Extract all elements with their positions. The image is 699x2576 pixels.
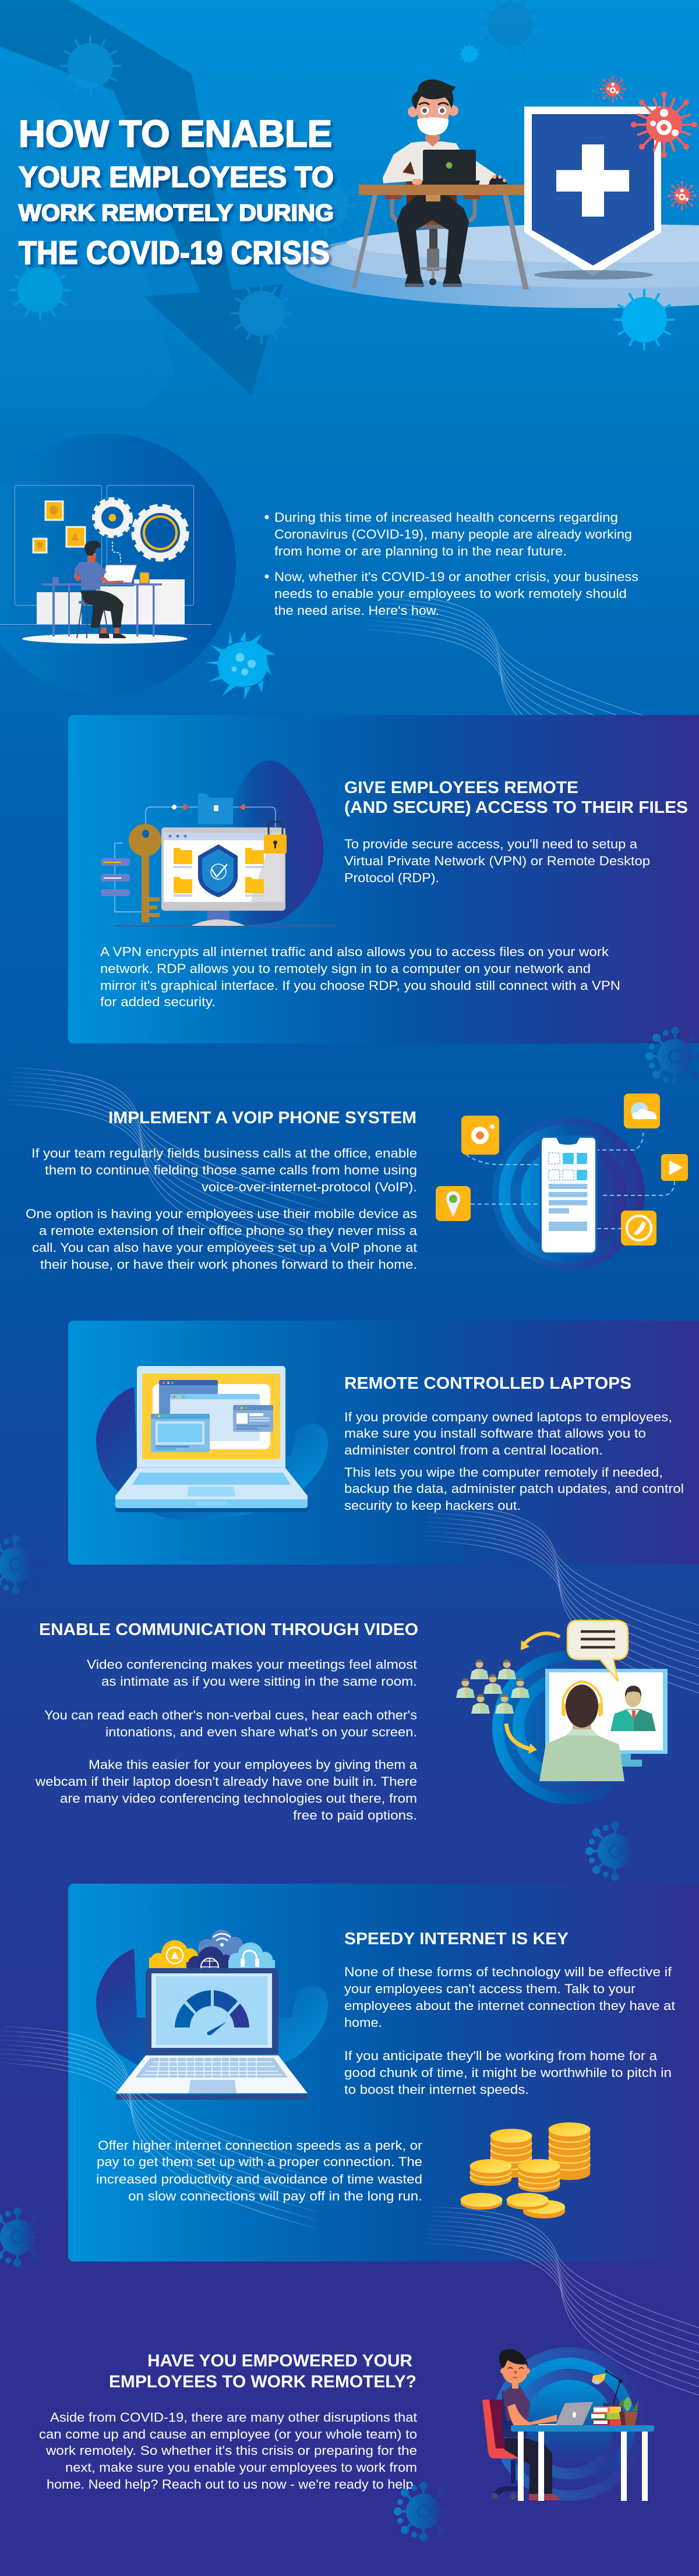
body text: Aside from COVID-19, there are many other disruptions that — [50, 2410, 417, 2425]
illustration: person at desk with laptop — [482, 2347, 654, 2501]
heading: REMOTE CONTROLLED LAPTOPS — [344, 1374, 631, 1393]
bullet list: needs to enable your employees to work remotely should — [274, 586, 627, 601]
wave lines — [6, 1068, 333, 1271]
red viruses — [599, 76, 697, 210]
illustration: secure files monitor — [101, 760, 337, 926]
virus blue — [205, 631, 276, 700]
body text — [344, 1410, 684, 1513]
body text: on slow connections will pay off in the long run. — [128, 2189, 422, 2203]
chair — [385, 164, 481, 285]
body text: To provide secure access, you'll need to setup a — [344, 837, 638, 851]
shirt — [383, 141, 496, 185]
heading: IMPLEMENT A VOIP PHONE SYSTEM — [108, 1109, 416, 1127]
wave lines — [0, 2026, 322, 2230]
wave lines — [423, 1504, 699, 1707]
background arrow shape — [0, 0, 283, 408]
body text: free to paid options. — [293, 1808, 417, 1823]
bullet list — [264, 510, 638, 618]
body text: This lets you wipe the computer remotely if needed, — [344, 1465, 663, 1480]
wave lines — [365, 593, 691, 797]
body text: Virtual Private Network (VPN) or Remote Desktop — [344, 854, 650, 868]
chair — [482, 2400, 530, 2499]
panel: intro — [0, 433, 691, 797]
body text: good chunk of time, it might be worthwhile to pitch in — [344, 2065, 672, 2080]
clouds — [149, 1930, 275, 1976]
body text: You can read each other's non-verbal cues, hear each other's — [44, 1708, 417, 1722]
body text: backup the data, administer patch updates, and control — [344, 1481, 684, 1496]
virus decoration — [645, 1027, 699, 1086]
virus decoration left — [0, 2207, 47, 2267]
laptop — [419, 150, 480, 185]
icon: coin stacks — [460, 2122, 591, 2218]
panel: speedy internet card — [0, 1884, 699, 2410]
person at desk — [352, 79, 529, 289]
heading — [344, 779, 688, 817]
panel: remote controlled laptops card — [68, 1321, 699, 1565]
body text: your employees can't access them. Talk to your — [344, 1981, 636, 1996]
person — [499, 2349, 559, 2500]
body text: administer control from a central location. — [344, 1443, 603, 1457]
title: YOUR EMPLOYEES TO — [19, 161, 334, 193]
bullet list: from home or are planning to in the near future. — [274, 544, 567, 558]
body text — [96, 1965, 675, 2203]
body text: mirror it's graphical interface. If you choose RDP, you should still connect with a VPN — [100, 978, 620, 993]
body text: home. — [344, 2015, 382, 2030]
body text: If you anticipate they'll be working from home for a — [344, 2048, 658, 2063]
body text: them to continue fielding those same calls from home using — [45, 1163, 417, 1177]
body text: pay to get them set up with a proper connection. The — [97, 2154, 422, 2169]
illustration: video call — [456, 1620, 668, 1804]
illustration: laptop with windows — [96, 1366, 328, 1520]
body text: increased productivity and avoidance of time wasted — [96, 2172, 422, 2186]
platform ellipses — [285, 224, 699, 308]
heading: SPEEDY INTERNET IS KEY — [344, 1930, 569, 1948]
body text: voice-over-internet-protocol (VoIP). — [202, 1180, 417, 1194]
title: THE COVID-19 CRISIS — [19, 234, 330, 271]
body text: work remotely. So whether it's this crisis or preparing for the — [45, 2443, 417, 2458]
shoes — [405, 274, 462, 287]
body text — [35, 1657, 418, 1823]
virus decoration — [394, 2482, 453, 2541]
title: WORK REMOTELY DURING — [19, 200, 334, 226]
virus decoration left — [0, 1535, 45, 1594]
body text: a remote extension of their office phone so they never miss a — [39, 1223, 418, 1238]
body text — [26, 1146, 418, 1272]
hands — [412, 175, 508, 185]
heading — [109, 2351, 416, 2391]
bullet list: Coronavirus (COVID-19), many people are already working — [274, 527, 632, 542]
body text: security to keep hackers out. — [344, 1498, 521, 1513]
body text: If you provide company owned laptops to employees, — [344, 1410, 672, 1424]
trousers — [397, 195, 469, 274]
body text — [39, 2410, 417, 2492]
body text: Offer higher internet connection speeds as a perk, or — [98, 2138, 422, 2153]
illustration: speedometer laptop — [96, 1930, 328, 2100]
heading: EMPLOYEES TO WORK REMOTELY? — [109, 2372, 416, 2391]
shield — [524, 107, 661, 279]
bullet list: During this time of increased health concerns regarding — [274, 510, 618, 525]
body text: Video conferencing makes your meetings feel almost — [87, 1657, 417, 1672]
illustration: phone with app tiles — [436, 1094, 688, 1270]
body text: to boost their internet speeds. — [344, 2082, 529, 2097]
virus bright bottom right — [615, 290, 674, 349]
body text: for added security. — [100, 995, 216, 1009]
desk items — [538, 2370, 639, 2426]
body text: call. You can also have your employees set up a VoIP phone at — [32, 1240, 417, 1255]
bullet list: the need arise. Here's how. — [274, 603, 439, 618]
panel: closing — [39, 2347, 654, 2541]
body text: make sure you install software that allows you to — [344, 1426, 646, 1441]
faint virus group — [10, 0, 540, 343]
panel: video communication — [35, 1620, 668, 1823]
body text: as intimate as if you were sitting in the same room. — [101, 1674, 417, 1689]
virus decoration — [585, 1821, 645, 1881]
body text: A VPN encrypts all internet traffic and also allows you to access files on your work — [100, 944, 609, 959]
illustration: worker at desk with gears — [0, 433, 236, 695]
hero panel — [0, 0, 699, 408]
body text: network. RDP allows you to remotely sign in to a computer on your network and — [100, 961, 591, 976]
body text: Protocol (RDP). — [344, 871, 439, 885]
body text: Make this easier for your employees by giving them a — [89, 1757, 418, 1772]
body text: intonations, and even share what's on your screen. — [105, 1725, 417, 1739]
desk — [352, 185, 529, 289]
heading: GIVE EMPLOYEES REMOTE — [344, 779, 578, 797]
title — [19, 112, 334, 271]
body text: their house, or have their work phones forward to their home. — [40, 1257, 417, 1272]
wave lines right — [425, 2207, 699, 2410]
panel: remote access card — [68, 715, 699, 1043]
body text: None of these forms of technology will be effective if — [344, 1965, 672, 1979]
heading: HAVE YOU EMPOWERED YOUR — [147, 2351, 412, 2370]
bullet list: Now, whether it's COVID-19 or another crisis, your business — [274, 569, 638, 584]
body text: One option is having your employees use their mobile device as — [26, 1206, 417, 1221]
body text: employees about the internet connection they have at — [344, 1998, 675, 2013]
body text: are many video conferencing technologies out there, from — [60, 1791, 417, 1806]
heading: (AND SECURE) ACCESS TO THEIR FILES — [344, 798, 688, 817]
body text: can come up and cause an employee (or your whole team) to — [39, 2427, 417, 2441]
title: HOW TO ENABLE — [19, 112, 332, 155]
body text: webcam if their laptop doesn't already have one built in. There — [35, 1774, 417, 1789]
body text: next, make sure you enable your employees to work from — [65, 2460, 417, 2475]
body text: home. Need help? Reach out to us now - we're ready to help. — [47, 2477, 417, 2492]
panel: VoIP — [6, 1027, 699, 1272]
heading: ENABLE COMMUNICATION THROUGH VIDEO — [39, 1620, 418, 1639]
desk — [511, 2425, 654, 2501]
body text — [100, 837, 650, 1009]
head with mask — [408, 79, 458, 136]
body text: If your team regularly fields business calls at the office, enable — [31, 1146, 417, 1160]
